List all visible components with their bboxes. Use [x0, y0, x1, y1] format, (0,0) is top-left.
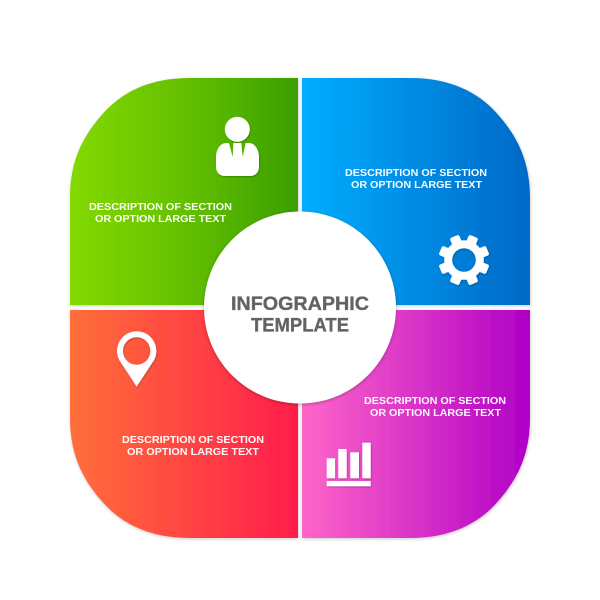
panel: purple	[302, 310, 530, 538]
text: purple description: OR OPTION LARGE TEXT	[370, 408, 502, 419]
panel: blue	[302, 78, 530, 305]
text: purple description: DESCRIPTION OF SECTION	[364, 396, 506, 407]
panel: red	[70, 310, 298, 538]
text: red description: DESCRIPTION OF SECTION	[122, 435, 264, 446]
icon: location pin	[117, 331, 156, 387]
center circle	[204, 212, 396, 404]
icon: person	[216, 117, 259, 176]
title: TEMPLATE	[251, 314, 349, 336]
text: green description: DESCRIPTION OF SECTION	[89, 202, 232, 213]
icon: gear	[439, 235, 489, 285]
text: red description: OR OPTION LARGE TEXT	[127, 447, 260, 458]
text: blue description: DESCRIPTION OF SECTION	[345, 168, 487, 179]
panel: green	[70, 78, 298, 305]
title: INFOGRAPHIC	[231, 293, 369, 315]
text: green description: OR OPTION LARGE TEXT	[95, 214, 227, 225]
text: blue description: OR OPTION LARGE TEXT	[351, 180, 483, 191]
icon: bar chart	[327, 443, 371, 486]
